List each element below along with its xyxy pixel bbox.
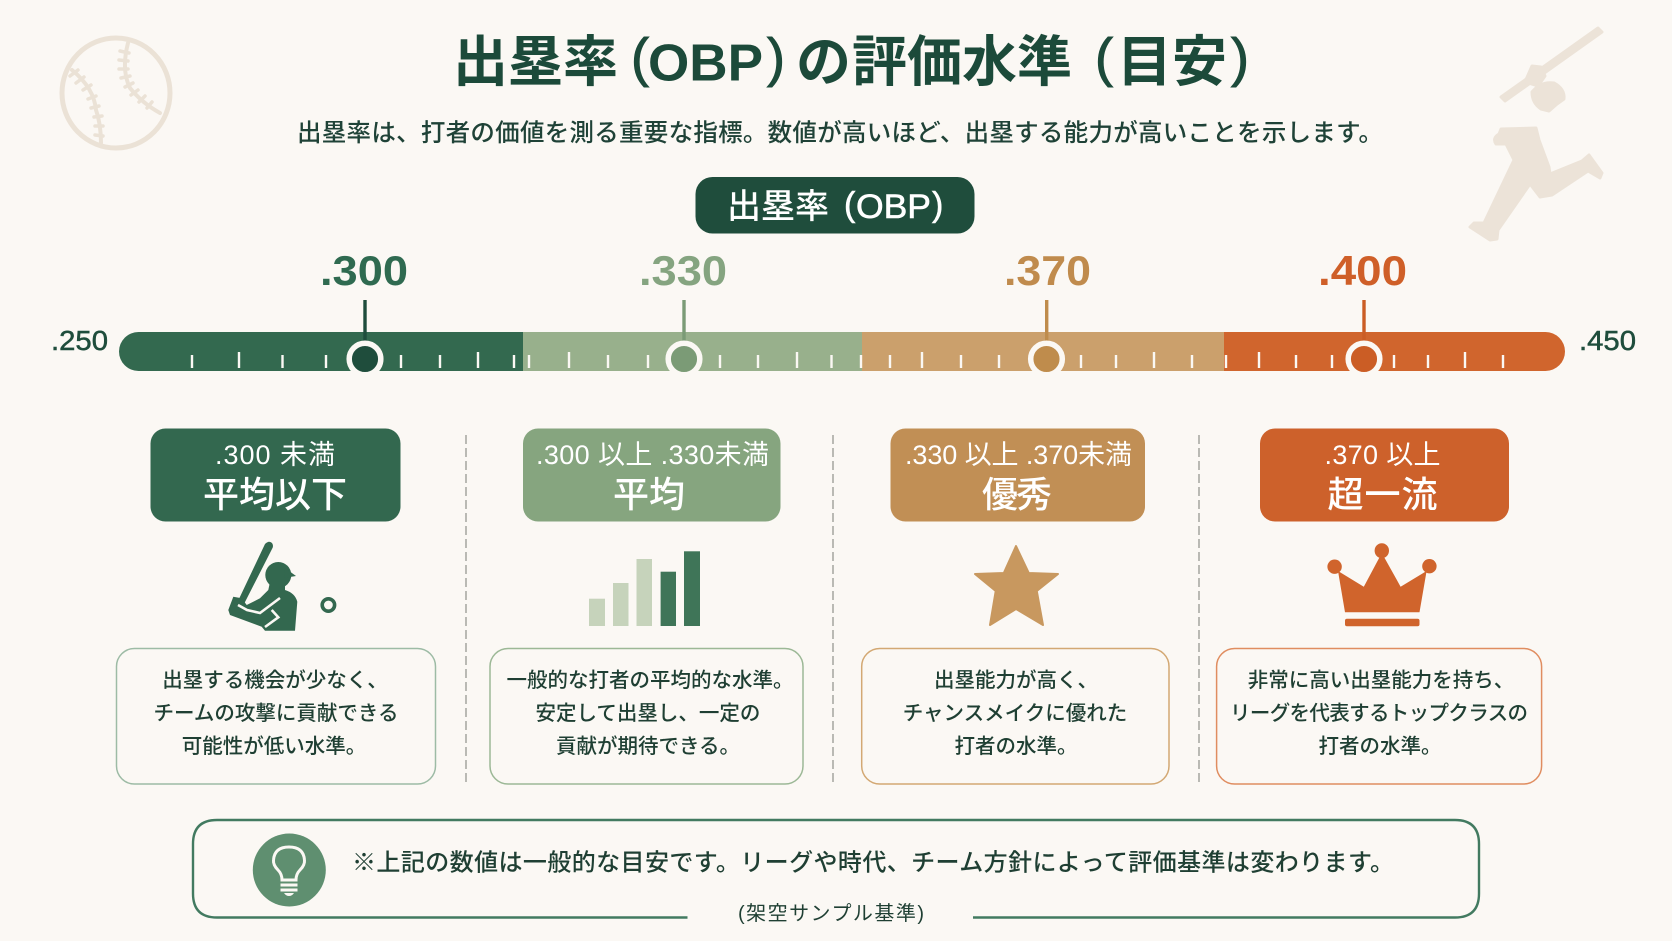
panel: below average [116, 428, 436, 784]
header badge [150, 428, 400, 522]
title: ) [1231, 28, 1249, 88]
header badge: 超一流 [1328, 474, 1438, 515]
icon: baseball watermark [62, 38, 170, 148]
description: 安定して出塁し、一定の [536, 702, 760, 725]
description: 一般的な打者の平均的な水準。 [506, 669, 794, 692]
description: チームの攻撃に貢献できる [154, 702, 398, 725]
marker .400 [1321, 256, 1406, 372]
marker .400: .400 [1318, 247, 1407, 294]
marker .300 [323, 256, 406, 372]
title: 評価水準 [852, 31, 1072, 93]
description [116, 648, 436, 784]
subtitle: 出塁率は、打者の価値を測る重要な指標。数値が高いほど、出塁する能力が高いことを示します。 [297, 119, 1383, 147]
description: 打者の水準。 [954, 735, 1078, 758]
note frame [193, 820, 1479, 918]
description: 非常に高い出塁能力を持ち、 [1248, 669, 1514, 692]
scale: OBP gauge [51, 247, 1636, 375]
header badge: 平均以下 [203, 474, 347, 515]
marker .330: .330 [639, 247, 727, 294]
scale label pill: OBP [856, 188, 931, 226]
description: 出塁する機会が少なく、 [162, 669, 388, 692]
header badge [890, 428, 1145, 522]
scale label pill: ) [932, 186, 943, 224]
header badge [1260, 428, 1509, 522]
gauge bar segments [119, 332, 1565, 371]
marker .370: .370 [1004, 247, 1091, 294]
scale label pill: ( [844, 186, 856, 224]
panel: excellent [862, 428, 1169, 784]
title: OBP [648, 34, 763, 92]
axis label .450: .450 [1579, 325, 1636, 356]
panel: average [490, 428, 803, 784]
description: 出塁能力が高く、 [934, 669, 1098, 692]
footnote label: (架空サンプル基準) [738, 902, 924, 925]
icon: crown [1327, 543, 1437, 626]
description: 貢献が期待できる。 [556, 735, 740, 758]
title: 出塁率 [453, 31, 618, 93]
description: チャンスメイクに優れた [903, 702, 1127, 725]
description [1217, 648, 1542, 784]
description [862, 648, 1169, 784]
scale label pill: 出塁率 [727, 188, 829, 226]
description: 可能性が低い水準。 [182, 735, 366, 758]
icon: star [975, 546, 1058, 625]
scale label pill [696, 177, 974, 234]
marker .370 [1007, 256, 1090, 372]
icon: bar chart [589, 551, 700, 626]
title: ( [631, 28, 649, 88]
title: ) [767, 28, 785, 88]
header badge: .300 未満 [215, 440, 335, 470]
title [453, 28, 1249, 93]
note text: ※上記の数値は一般的な目安です。リーグや時代、チーム方針によって評価基準は変わります。 [352, 850, 1394, 876]
header badge: 優秀 [982, 474, 1052, 515]
header badge: .300 以上 .330未満 [536, 440, 769, 470]
header badge [523, 428, 780, 522]
marker .300: .300 [320, 247, 408, 294]
header badge: 平均 [613, 474, 685, 515]
column dividers [466, 435, 1199, 782]
tick marks [192, 352, 1503, 368]
header badge: .330 以上 .370未満 [905, 440, 1132, 470]
header badge: .370 以上 [1324, 440, 1440, 470]
title: ( [1095, 28, 1113, 88]
title: 目安 [1117, 31, 1227, 93]
icon: batter [228, 542, 335, 631]
icon: batter silhouette watermark [1470, 28, 1602, 240]
description: リーグを代表するトップクラスの [1230, 702, 1528, 725]
callout: note [193, 820, 1479, 925]
icon: light bulb [253, 834, 326, 906]
description [490, 648, 803, 784]
marker .330 [642, 256, 726, 372]
title: の [796, 31, 851, 93]
description: 打者の水準。 [1318, 735, 1442, 758]
panel: top class [1217, 428, 1542, 784]
axis label .250: .250 [51, 325, 108, 356]
